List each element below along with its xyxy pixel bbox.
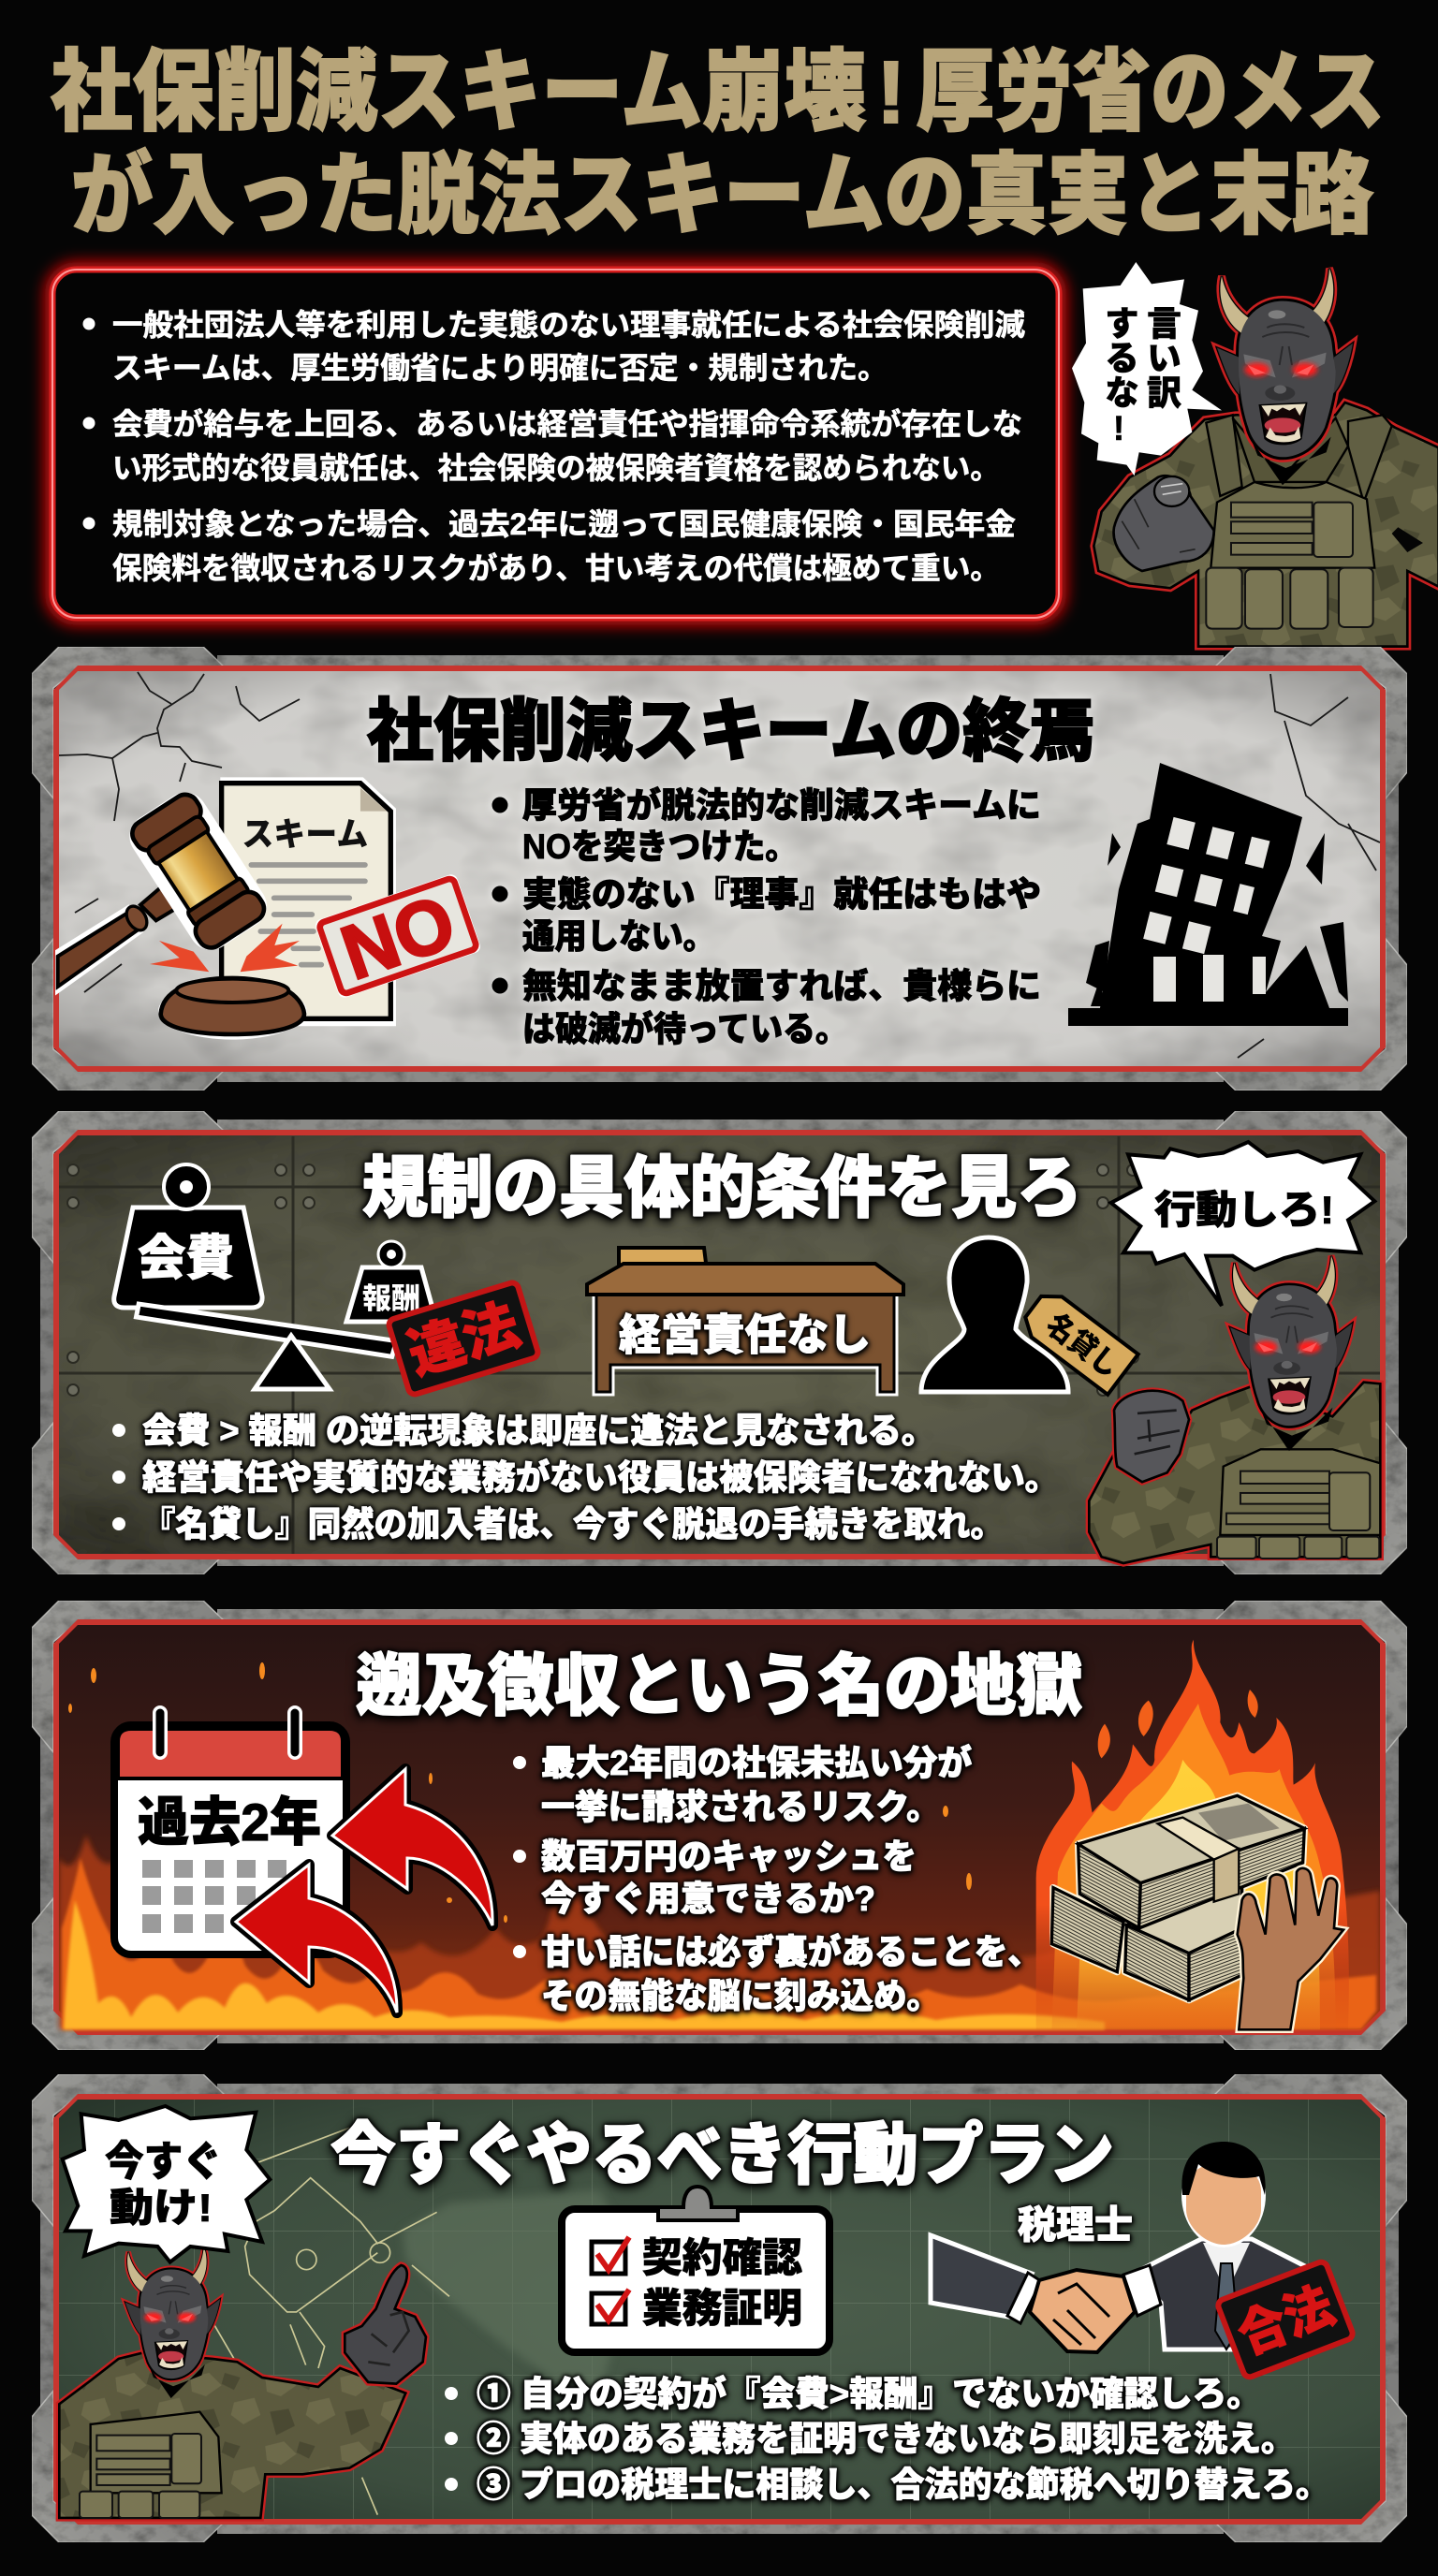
speech bubble: 行動しろ!: 行動しろ! <box>1154 1188 1334 1232</box>
icon: gavel and NO document: スキーム <box>242 816 368 853</box>
stamp: 違法 <box>388 1281 539 1396</box>
bullets: は破滅が待っている。 <box>522 1009 848 1048</box>
panel frame <box>32 647 1407 1090</box>
heading: 社保削減スキームの終焉 <box>367 694 1095 769</box>
arrow: lower red arrow <box>236 1865 397 2012</box>
character: fist-raising oni soldier <box>1089 1256 1380 1563</box>
stamp: 違法: 違法 <box>401 1294 527 1386</box>
wall cracks <box>59 672 1380 1058</box>
title: 社保削減スキーム崩壊 <box>51 43 866 142</box>
panel frame <box>32 1111 1407 1574</box>
icon: empty desk <box>587 1248 903 1392</box>
bullets: その無能な脳に刻み込め。 <box>541 1977 940 2015</box>
bullets: 厚労省が脱法的な削減スキームに <box>522 785 1041 825</box>
summary bullets: 会費が給与を上回る、あるいは経営責任や指揮命令系統が存在しな <box>112 407 1022 441</box>
character: pointing oni soldier <box>1093 269 1438 647</box>
icon: clipboard checklist <box>562 2187 829 2352</box>
bullets <box>513 1743 1041 2015</box>
background flames <box>59 1662 1380 2029</box>
character: pointing-up oni soldier <box>59 2247 426 2518</box>
panel background <box>53 1130 1386 1559</box>
speech bubble: 今すぐ動け!: 動け! <box>110 2186 213 2230</box>
bullets <box>112 1412 1059 1544</box>
title <box>51 43 1385 245</box>
stamp: 合法: 合法 <box>1230 2277 1342 2365</box>
bullets: 『名貸し』同然の加入者は、今すぐ脱退の手続きを取れ。 <box>142 1505 1004 1544</box>
bullets: 数百万円のキャッシュを <box>541 1837 917 1876</box>
icon: clipboard checklist: 契約確認 <box>642 2236 802 2281</box>
icon: gavel and NO document <box>58 780 483 1040</box>
steel plate seams and rivets <box>59 1136 1380 1554</box>
panel: 遡及徴収という名の地獄 <box>32 1601 1407 2050</box>
bullets: ② 実体のある業務を証明できないなら即刻足を洗え。 <box>477 2420 1295 2458</box>
icon: silhouette with 名貸し tag <box>921 1237 1138 1395</box>
summary bullets: 保険料を徴収されるリスクがあり、甘い考えの代償は極めて重い。 <box>112 551 1000 585</box>
icon: scale with weights: 報酬 <box>362 1282 420 1315</box>
title: ! <box>876 43 906 142</box>
bubble text: するな!: するな! <box>1099 305 1138 447</box>
bullets: ① 自分の契約が『会費>報酬』でないか確認しろ。 <box>477 2374 1261 2413</box>
icon: collapsing building <box>1068 763 1348 1026</box>
panel: 規制の具体的条件を見ろ <box>32 1111 1407 1574</box>
panel frame <box>32 2074 1407 2542</box>
bullets: 一挙に請求されるリスク。 <box>541 1788 940 1826</box>
stamp: 合法 <box>1216 2261 1355 2378</box>
bubble text: 言い訳: 言い訳 <box>1142 305 1181 409</box>
bullets: 甘い話には必ず裏があることを、 <box>541 1932 1041 1971</box>
bullets: ③ プロの税理士に相談し、合法的な節税へ切り替えろ。 <box>477 2466 1329 2504</box>
icon: calendar 過去2年: 過去2年 <box>138 1793 321 1852</box>
bullets: 実態のない『理事』就任はもはや <box>522 875 1041 914</box>
icon: silhouette with 名貸し tag: 名貸し <box>1040 1307 1126 1383</box>
speech bubble: 行動しろ! <box>1111 1142 1374 1306</box>
bullets: 今すぐ用意できるか? <box>541 1880 875 1918</box>
speech bubble: 言い訳するな! <box>1072 262 1222 476</box>
icon: burning cash and hand <box>1036 1640 1349 2029</box>
icon: calendar 過去2年 <box>114 1713 346 1954</box>
bullets: 無知なまま放置すれば、貴様らに <box>522 967 1041 1005</box>
label: 税理士: 税理士 <box>1018 2203 1133 2247</box>
bullets: 経営責任や実質的な業務がない役員は被保険者になれない。 <box>142 1457 1059 1497</box>
icon: tax accountant handshake <box>931 2142 1307 2352</box>
icon: empty desk: 経営責任なし <box>619 1310 871 1359</box>
icon: scale with weights <box>114 1164 436 1389</box>
panel: 社保削減スキームの終焉 <box>32 647 1407 1090</box>
icon: gavel and NO document: NO <box>331 879 465 996</box>
panel background <box>53 666 1386 1072</box>
bullets: NOを突きつけた。 <box>522 827 798 866</box>
panel: summary callout <box>52 270 1059 618</box>
icon: scale with weights: 会費 <box>138 1232 234 1286</box>
panel frame <box>32 1601 1407 2050</box>
bullets <box>492 785 1041 1048</box>
map grid <box>59 2100 1380 2519</box>
heading: 今すぐやるべき行動プラン <box>330 2118 1114 2193</box>
tactical map lines <box>213 2128 637 2515</box>
bullets: 会費 > 報酬 の逆転現象は即座に違法と見なされる。 <box>142 1412 935 1450</box>
bullets <box>445 2374 1329 2504</box>
icon: clipboard checklist: 業務証明 <box>642 2287 802 2332</box>
panel background <box>53 1619 1386 2035</box>
summary bullets: 規制対象となった場合、過去2年に遡って国民健康保険・国民年金 <box>112 507 1016 541</box>
bullets: 最大2年間の社保未払い分が <box>541 1743 972 1782</box>
speech bubble: 今すぐ動け!: 今すぐ <box>105 2139 222 2185</box>
arrow: upper red arrow <box>332 1769 492 1925</box>
bullets: 通用しない。 <box>522 917 715 956</box>
speech bubble: 今すぐ動け! <box>63 2106 270 2262</box>
title: 厚労省のメス <box>917 43 1385 142</box>
summary bullets: 一般社団法人等を利用した実態のない理事就任による社会保険削減 <box>112 308 1025 342</box>
summary bullets: い形式的な役員就任は、社会保険の被保険者資格を認められない。 <box>112 451 1000 485</box>
summary bullets <box>82 308 1025 585</box>
summary bullets: スキームは、厚生労働省により明確に否定・規制された。 <box>112 351 888 385</box>
panel: 今すぐやるべき行動プラン <box>32 2074 1407 2542</box>
heading: 規制の具体的条件を見ろ <box>362 1151 1082 1226</box>
panel background <box>53 2094 1386 2525</box>
heading: 遡及徴収という名の地獄 <box>356 1649 1082 1724</box>
